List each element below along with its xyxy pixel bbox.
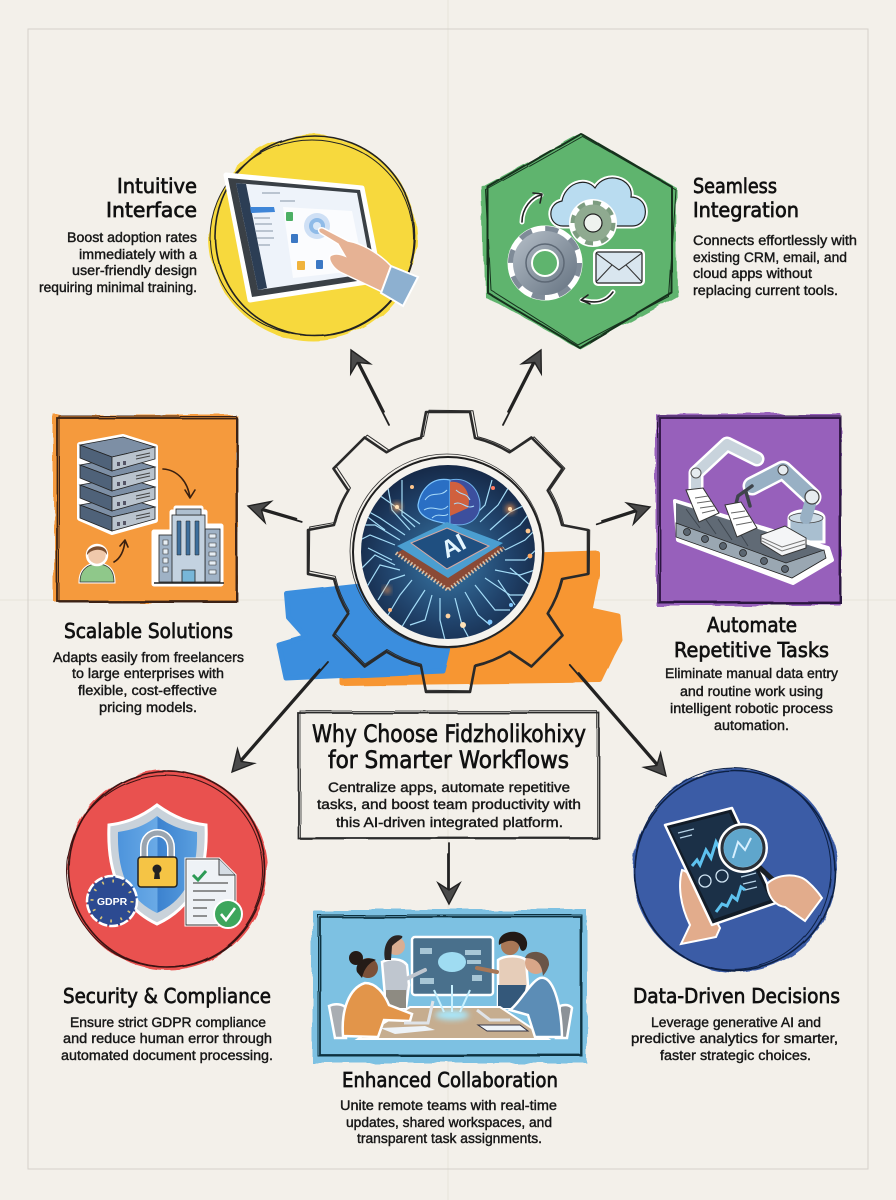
right robot arm	[736, 465, 819, 518]
subtitle: this AI-driven integrated platform.	[336, 815, 563, 830]
panel: Automate Repetitive Tasks	[656, 414, 841, 733]
chairs	[329, 1004, 572, 1038]
brain	[418, 479, 480, 525]
heading	[674, 613, 829, 662]
heading: Integration	[693, 198, 799, 222]
small gear	[575, 205, 611, 241]
description	[665, 666, 838, 733]
description: immediately with a	[79, 247, 198, 262]
description	[631, 1015, 838, 1063]
arrow: to Scalable Solutions	[245, 495, 305, 532]
description: requiring minimal training.	[39, 280, 197, 295]
icon: orange scaling square	[54, 415, 237, 602]
heading: Intuitive	[117, 174, 197, 198]
arrow: to Automate Repetitive Tasks	[593, 497, 653, 535]
icon: yellow tablet circle	[209, 135, 418, 341]
description: Connects effortlessly with	[693, 233, 857, 248]
panel: Data-Driven Decisions	[631, 768, 840, 1063]
panel: Enhanced Collaboration	[312, 910, 587, 1146]
description: existing CRM, email, and	[693, 250, 847, 265]
standing colleague right	[477, 932, 528, 1008]
tablet	[226, 175, 380, 300]
description: Leverage generative AI and	[651, 1015, 821, 1030]
server stack	[80, 437, 155, 532]
central AI chip medallion	[350, 454, 544, 648]
left hand	[680, 870, 720, 944]
panel: Security and Compliance	[61, 770, 273, 1063]
description: flexible, cost-effective	[78, 683, 217, 698]
description: automated document processing.	[61, 1048, 273, 1063]
heading: Data-Driven Decisions	[633, 984, 840, 1008]
arrow: to Data-Driven Decisions	[561, 658, 674, 783]
description	[693, 233, 857, 298]
analytics tablet	[665, 808, 776, 925]
icon: red security circle	[67, 770, 267, 970]
heading	[693, 174, 799, 222]
heading: Automate	[707, 613, 797, 637]
document with checks	[186, 859, 242, 928]
papers	[380, 1026, 435, 1034]
robot base	[789, 510, 824, 542]
description: faster strategic choices.	[660, 1048, 811, 1063]
description: updates, shared workspaces, and	[346, 1115, 552, 1130]
GDPR badge	[87, 876, 137, 926]
glowing nodes	[384, 485, 532, 628]
circuit traces	[360, 480, 538, 640]
description	[39, 230, 198, 295]
description	[53, 650, 244, 715]
description: Ensure strict GDPR compliance	[70, 1015, 266, 1030]
seated colleague left	[343, 951, 433, 1037]
heading	[106, 174, 197, 222]
envelope	[595, 251, 643, 284]
title: Why Choose Fidzholikohixy	[312, 720, 586, 748]
panel: Scalable Solutions	[53, 415, 244, 715]
description: Boost adoption rates	[67, 230, 197, 245]
description: predictive analytics for smarter,	[631, 1031, 838, 1046]
seated colleague right	[477, 952, 562, 1037]
arrow: to Enhanced Collaboration	[438, 843, 460, 904]
arrow: to Seamless Integration	[493, 345, 551, 430]
pointing hand	[319, 228, 391, 292]
large gear	[513, 231, 577, 295]
chip label: AI	[437, 529, 471, 564]
arrow: to Security and Compliance	[224, 655, 336, 779]
description	[340, 1098, 557, 1146]
description: and reduce human error through	[63, 1031, 272, 1046]
description: Adapts easily from freelancers	[53, 650, 244, 665]
documents on belt	[686, 488, 806, 556]
table	[358, 1007, 548, 1039]
left robot arm	[691, 444, 757, 492]
title: for Smarter Workflows	[328, 746, 569, 774]
standing colleague left	[382, 935, 425, 1008]
subtitle: tasks, and boost team productivity with	[317, 797, 581, 812]
description: Eliminate manual data entry	[665, 666, 838, 681]
panel: Intuitive Interface	[39, 135, 418, 341]
subtitle	[317, 780, 581, 830]
icon: team meeting scene	[312, 910, 587, 1063]
cloud	[551, 178, 645, 226]
icon: blue analytics circle	[633, 768, 837, 972]
heading: Security & Compliance	[63, 984, 271, 1008]
description: user-friendly design	[72, 263, 197, 278]
heading: Interface	[106, 198, 197, 222]
isometric chip	[396, 522, 504, 590]
GDPR badge: GDPR	[97, 896, 128, 908]
description: and routine work using	[680, 684, 823, 699]
heading: Scalable Solutions	[64, 619, 233, 643]
shield	[109, 805, 206, 924]
shirt cuff	[381, 266, 418, 306]
hologram	[434, 985, 470, 1020]
description: transparent task assignments.	[357, 1131, 542, 1146]
subtitle: Centralize apps, automate repetitive	[328, 780, 570, 795]
description: pricing models.	[99, 700, 197, 715]
heading: Repetitive Tasks	[674, 638, 829, 662]
arrow: to Intuitive Interface	[341, 345, 399, 430]
description	[61, 1015, 273, 1063]
magnifying glass	[721, 826, 773, 880]
description: to large enterprises with	[72, 666, 224, 681]
description: automation.	[714, 718, 789, 733]
heading: Seamless	[693, 174, 777, 198]
scaling arrows	[114, 469, 195, 562]
icon: purple robotic automation square	[656, 414, 841, 606]
title box	[298, 711, 599, 839]
description: Unite remote teams with real-time	[340, 1098, 557, 1113]
title	[312, 720, 586, 774]
person	[80, 545, 114, 582]
wall display	[412, 937, 493, 995]
cycle arrows	[522, 195, 613, 302]
heading: Enhanced Collaboration	[342, 1068, 558, 1092]
padlock	[138, 833, 177, 887]
paint swashes behind central gear	[279, 553, 620, 683]
office building	[154, 508, 224, 584]
right hand	[767, 875, 822, 921]
description: replacing current tools.	[693, 283, 838, 298]
icon: green integration hexagon	[482, 133, 677, 349]
description: cloud apps without	[693, 266, 812, 281]
panel: Seamless Integration	[482, 133, 857, 349]
conveyor belt	[675, 501, 832, 583]
description: intelligent robotic process	[670, 701, 833, 716]
central gear outline	[308, 409, 591, 692]
